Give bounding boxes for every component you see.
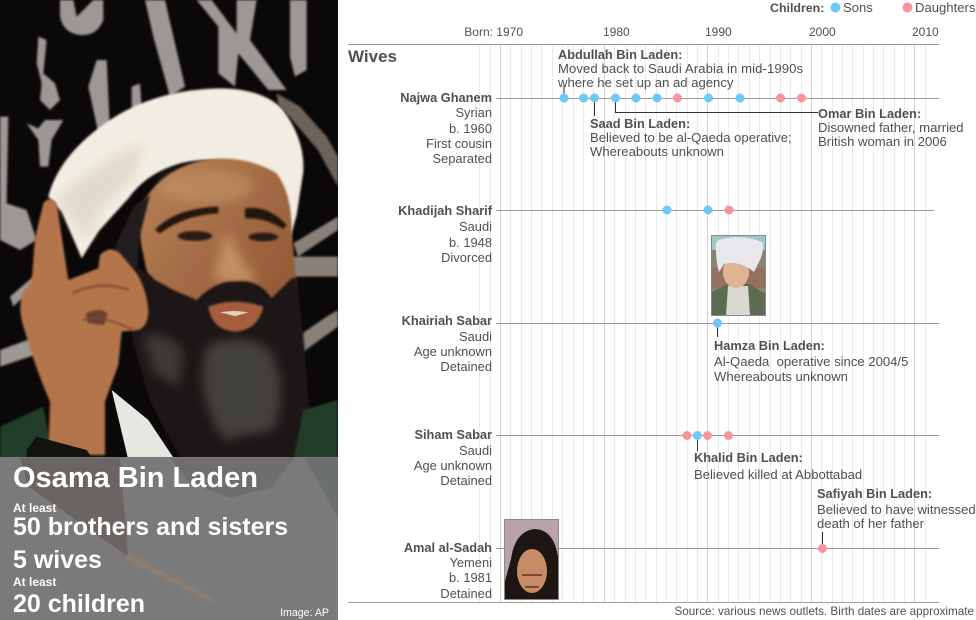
- wife details: Amal al-Sadah: [404, 540, 492, 555]
- turban: [48, 88, 303, 258]
- heading: wives: Wives: [348, 47, 397, 66]
- brows and eyes: [155, 207, 218, 233]
- wife details: Khairiah Sabar: [402, 313, 492, 328]
- wife details: [400, 90, 492, 166]
- lips: [208, 302, 263, 332]
- axis year labels: 2010: [912, 25, 939, 39]
- fact: siblings: At least: [13, 501, 56, 515]
- wife details: [404, 540, 492, 601]
- wife details: Siham Sabar: [414, 427, 492, 442]
- wife details: b. 1948: [449, 235, 492, 250]
- wife details: Detained: [440, 586, 492, 601]
- axis year labels: Born: 1970: [464, 25, 523, 39]
- callout: Saad: Believed to be al-Qaeda operative;: [590, 130, 792, 145]
- wife row: Khairiah Sabar: [402, 313, 939, 384]
- callout: Hamza: Whereabouts unknown: [714, 369, 848, 384]
- wife details: b. 1960: [449, 121, 492, 136]
- nose highlight: [214, 230, 255, 283]
- wife details: Age unknown: [414, 458, 492, 473]
- callout: Safiyah: Safiyah Bin Laden:: [817, 486, 932, 501]
- wife details: Age unknown: [414, 344, 492, 359]
- children dots: [682, 431, 733, 440]
- face: [139, 157, 298, 302]
- callout: Safiyah: death of her father: [817, 516, 925, 531]
- callout: Abdullah: Moved back to Saudi Arabia in mid-1990s: [558, 61, 803, 76]
- callout: Hamza: [714, 338, 908, 384]
- legend: children: [770, 0, 976, 15]
- flag calligraphy background: [0, 0, 338, 367]
- fact: wives: 5 wives: [13, 546, 102, 574]
- callout: Abdullah: where he set up an ad agency: [557, 75, 734, 90]
- fact: children: At least: [13, 575, 56, 589]
- photo: portrait of Osama Bin Laden: [0, 0, 338, 457]
- children dots: [662, 206, 734, 214]
- wife details: Khadijah Sharif: [398, 203, 493, 218]
- leader line: [822, 532, 824, 548]
- wife details: Saudi: [459, 443, 492, 458]
- wife details: [402, 313, 492, 374]
- child dot: [713, 318, 722, 328]
- callout: Abdullah: [557, 47, 803, 90]
- caption heading: Osama Bin Laden: [13, 462, 258, 494]
- hand: [20, 199, 148, 455]
- callout: Omar: British woman in 2006: [818, 134, 947, 149]
- wife details: Najwa Ghanem: [400, 90, 492, 105]
- legend: children: Daughters: [915, 0, 976, 15]
- timeline grid: [348, 44, 939, 602]
- photo: Amal al-Sadah: [504, 520, 558, 600]
- source note: Source: various news outlets. Birth dates are approximate: [675, 605, 974, 618]
- axis year labels: 1980: [603, 25, 630, 39]
- wife details: Saudi: [459, 329, 492, 344]
- wife details: Syrian: [455, 105, 492, 120]
- hair: [115, 195, 150, 275]
- wife details: b. 1981: [449, 570, 492, 585]
- callout: Saad: Saad Bin Laden:: [590, 116, 690, 131]
- callout: Omar: [818, 106, 964, 149]
- wife row: Najwa Ghanem: [400, 47, 964, 166]
- child dot: [818, 544, 827, 553]
- image credit: Image: AP: [280, 607, 329, 619]
- callout: Omar: Disowned father, married: [818, 120, 964, 135]
- shirt and jacket: [112, 390, 175, 460]
- callout: Khalid: Khalid Bin Laden:: [694, 450, 803, 465]
- wife row: Siham Sabar: [414, 427, 939, 488]
- legend: children: Sons: [843, 0, 873, 15]
- callout: Khalid: Believed killed at Abbottabad: [694, 467, 862, 482]
- axis year labels: 2000: [809, 25, 836, 39]
- fact: siblings: 50 brothers and sisters: [13, 513, 288, 541]
- wife details: First cousin: [426, 136, 492, 151]
- callout: Saad: [590, 116, 792, 159]
- callout: Hamza: Hamza Bin Laden:: [714, 338, 825, 353]
- wife details: Separated: [432, 151, 492, 166]
- axis year labels: 1990: [705, 25, 732, 39]
- callout: Hamza: Al-Qaeda operative since 2004/5: [714, 354, 908, 369]
- wife details: Yemeni: [449, 555, 492, 570]
- callout: Safiyah: [817, 486, 976, 531]
- watch strap: [26, 436, 91, 457]
- children dots: [560, 94, 806, 102]
- axis year labels: [464, 25, 939, 39]
- wife details: [414, 427, 492, 488]
- wife row: Khadijah Sharif: [398, 203, 934, 265]
- callout: Abdullah: Abdullah Bin Laden:: [558, 47, 682, 62]
- wife details: [398, 203, 493, 265]
- fact: children: 20 children: [13, 590, 145, 618]
- fact: children: [13, 575, 145, 618]
- callout: Omar: Omar Bin Laden:: [818, 106, 921, 121]
- leader line: [696, 436, 698, 451]
- photo: Hamza Bin Laden: [712, 236, 766, 316]
- wife details: Saudi: [459, 219, 492, 234]
- wife details: Divorced: [441, 250, 492, 265]
- legend: children: Children:: [770, 1, 824, 15]
- beard: [128, 267, 310, 458]
- callout: Saad: Whereabouts unknown: [590, 144, 724, 159]
- callout: Safiyah: Believed to have witnessed: [817, 502, 976, 517]
- callout: Khalid: [694, 450, 862, 482]
- leader line: [716, 323, 718, 337]
- caption panel: key facts: [0, 457, 338, 620]
- leader lines: [564, 85, 818, 116]
- wife row: Amal al-Sadah: [404, 486, 976, 601]
- wife details: Detained: [440, 359, 492, 374]
- wife details: Detained: [440, 473, 492, 488]
- forehead highlight: [160, 170, 253, 203]
